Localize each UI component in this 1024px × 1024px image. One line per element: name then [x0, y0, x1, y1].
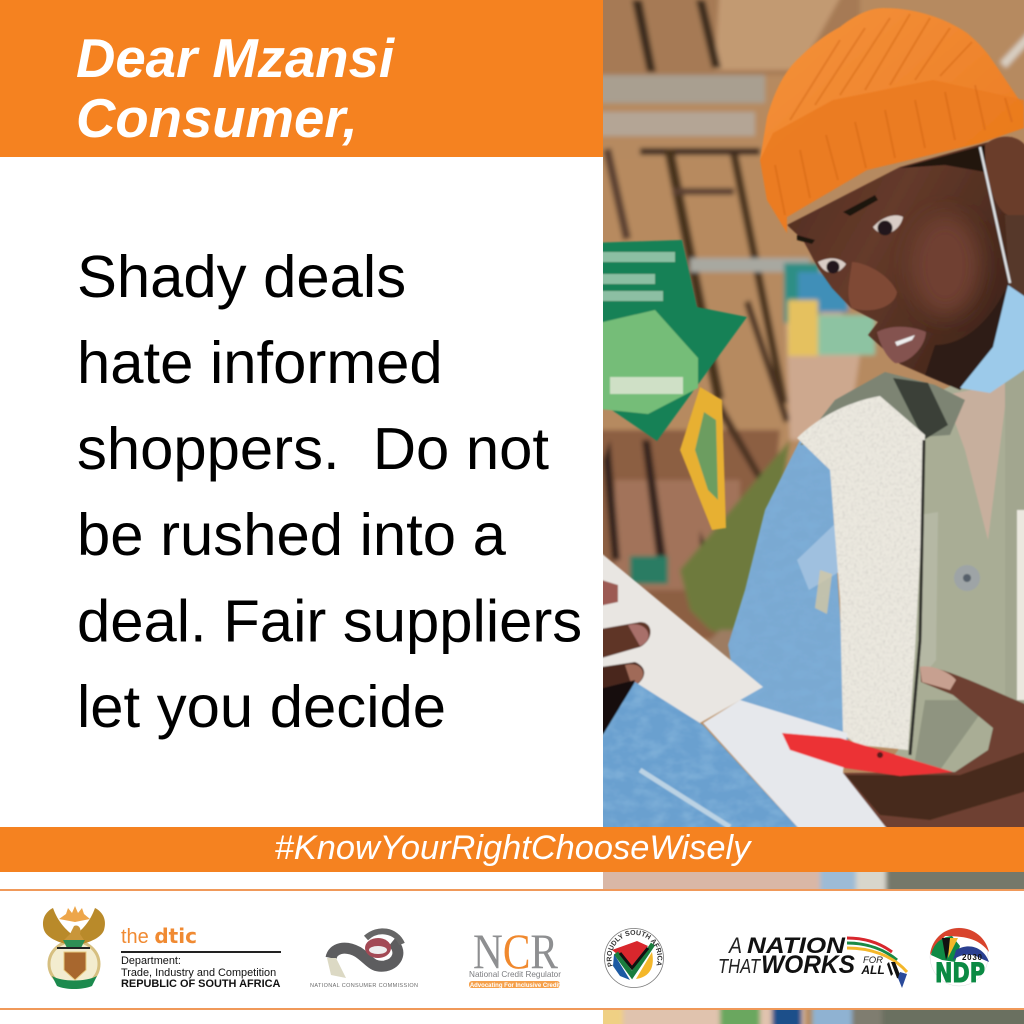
logo: National Consumer Commission: NATIONAL CONSUMER COMMISSION	[310, 983, 418, 989]
logo: A Nation That Works For All: FOR	[863, 955, 883, 966]
lower background strips below banner	[590, 865, 1024, 1024]
logo: the dtic: Department:	[121, 955, 181, 967]
logo: National Credit Regulator: National Credit Regulator	[469, 970, 561, 979]
logo: Proudly South African	[604, 928, 664, 988]
logo: NDP 2030: 2030	[962, 953, 983, 962]
logo: A Nation That Works For All: ALL	[860, 963, 885, 977]
hat ribs	[775, 14, 1012, 215]
hair	[900, 145, 985, 172]
logo: the dtic: REPUBLIC OF SOUTH AFRICA	[121, 978, 281, 990]
title: Dear Mzansi	[76, 28, 396, 89]
hashtag banner	[0, 827, 1024, 872]
man's hand holding phone	[843, 666, 1024, 830]
logo: National Credit Regulator: NCR	[473, 923, 559, 979]
red phone	[782, 733, 953, 776]
photo: shopper reading a receipt in a store	[560, 0, 1024, 1024]
logo: the dtic	[121, 924, 281, 990]
beard	[925, 290, 1005, 390]
logo: National Credit Regulator: Advocating For Inclusive Credit	[470, 983, 560, 989]
logo: NDP 2030: NDP	[935, 958, 985, 989]
logo: A Nation That Works For All: WORKS	[761, 951, 855, 979]
main message: be rushed into a	[77, 501, 507, 568]
mask strap	[980, 147, 1010, 283]
orange header panel	[0, 0, 603, 157]
mouth	[877, 327, 926, 363]
receipts	[595, 548, 888, 830]
eyes	[873, 215, 903, 234]
denim sleeve	[595, 682, 800, 830]
logo: NDP 2030	[930, 928, 989, 989]
hat, face and mask of the man	[760, 8, 1024, 393]
logo: A Nation That Works For All	[718, 933, 907, 988]
logo: National Consumer Commission	[310, 931, 418, 989]
jacket and inner shirt	[800, 370, 1024, 773]
face	[787, 137, 1024, 390]
left hand fingers	[603, 580, 652, 736]
store posters	[784, 263, 875, 440]
moss wall	[680, 440, 790, 640]
logo: A Nation That Works For All: A	[727, 933, 742, 958]
main message: shoppers. Do not	[77, 415, 549, 482]
man figure	[595, 8, 1024, 890]
title: Consumer,	[76, 88, 358, 149]
neck	[1000, 210, 1024, 305]
main message: deal. Fair suppliers	[77, 588, 582, 654]
yellow hanging sign	[680, 387, 726, 530]
store ceiling background	[560, 0, 1024, 1024]
eyebrows	[843, 195, 878, 216]
hashtag banner: #KnowYourRightChooseWisely	[275, 829, 752, 867]
logo: the dtic: Trade, Industry and Competition	[121, 967, 276, 979]
sherpa collar	[797, 396, 925, 755]
main message: let you decide	[77, 673, 446, 740]
face mask	[960, 285, 1024, 393]
logo: A Nation That Works For All: THAT	[718, 956, 761, 978]
logo: the dtic: the dtic	[121, 924, 197, 948]
ear	[985, 137, 1024, 215]
denim jacket body	[728, 440, 848, 740]
main message: hate informed	[77, 329, 443, 396]
hanging green store sign	[590, 240, 747, 441]
hat	[760, 8, 1024, 233]
cheek highlight	[910, 215, 980, 315]
logo: coat of arms	[43, 906, 105, 989]
logo: Proudly South African: PROUDLY SOUTH AFRICAN	[606, 930, 662, 967]
nose	[848, 262, 897, 310]
logo: A Nation That Works For All: NATION	[747, 933, 846, 958]
main message: Shady deals	[77, 243, 406, 310]
